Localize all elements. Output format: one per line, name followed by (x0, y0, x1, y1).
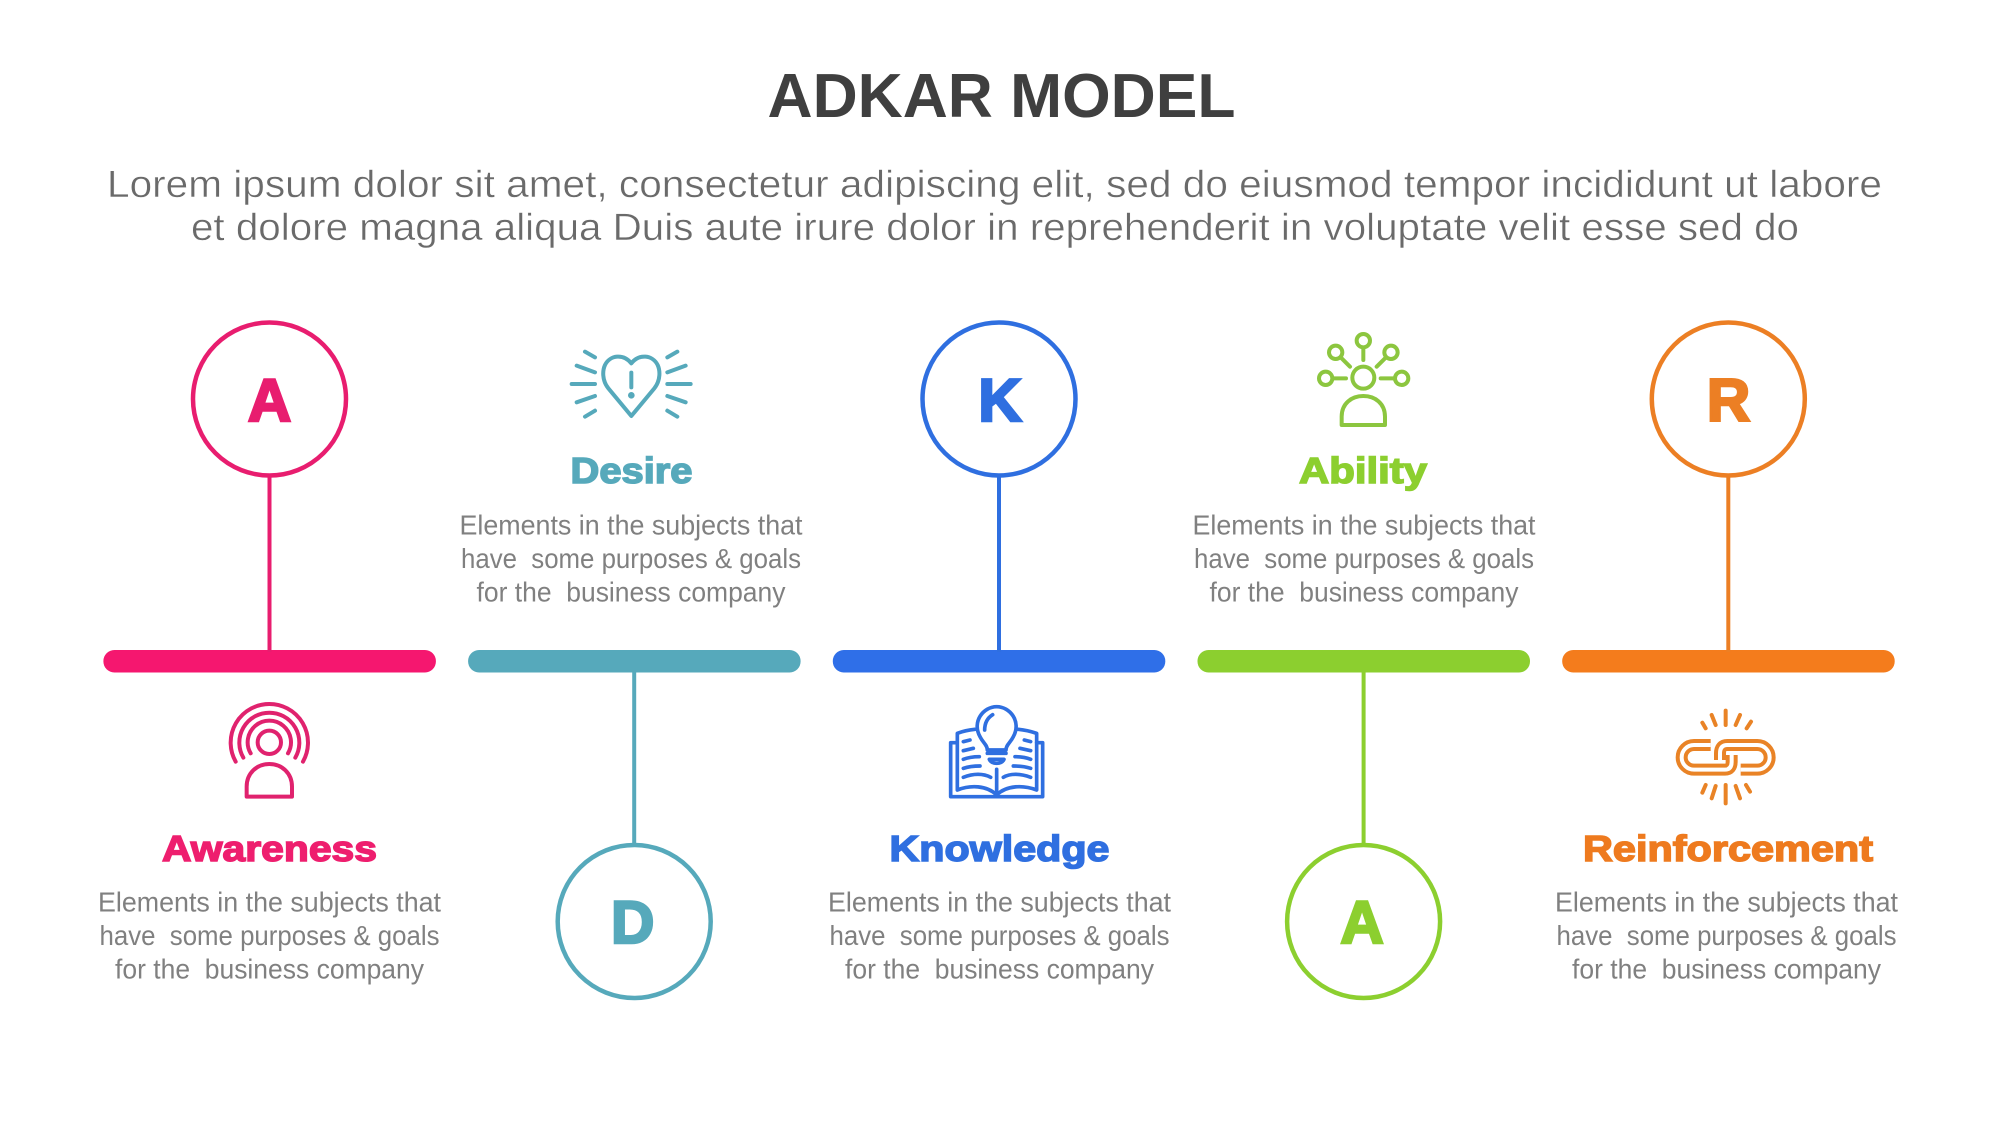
description: knowledge (828, 886, 1171, 984)
badge: letter R: R (1707, 367, 1750, 434)
subtitle: Lorem ipsum dolor sit amet, consectetur adipiscing elit, sed do eiusmod tempor incididunt ut labore (107, 164, 1882, 206)
heading: knowledge: Knowledge (890, 828, 1110, 869)
description: ability (1192, 510, 1536, 608)
timeline bar: knowledge (833, 650, 1165, 672)
stem: reinforcement (1726, 476, 1730, 652)
description: desire (460, 510, 803, 608)
badge: letter A (193, 322, 346, 476)
panel: desire (460, 352, 803, 998)
timeline bar: desire (468, 650, 801, 672)
description: ability: for the business company (1210, 576, 1519, 608)
panel: reinforcement (1555, 322, 1898, 984)
icon: heart with exclamation (572, 352, 691, 417)
heading: ability: Ability (1299, 450, 1427, 491)
panel: awareness (98, 322, 441, 984)
badge: letter K: K (978, 367, 1022, 434)
heading: desire: Desire (570, 450, 692, 491)
description: knowledge: have some purposes & goals (830, 920, 1170, 951)
description: ability: Elements in the subjects that (1192, 510, 1536, 540)
description: awareness: have some purposes & goals (100, 920, 440, 951)
description: reinforcement: Elements in the subjects that (1555, 886, 1898, 918)
badge: letter A (1287, 845, 1440, 998)
icon: person with connected nodes (1319, 334, 1408, 425)
icon: person broadcasting signal (231, 704, 308, 797)
badge: letter A: A (248, 367, 291, 434)
panel: ability (1192, 334, 1536, 998)
heading: awareness: Awareness (162, 828, 377, 869)
stem: knowledge (997, 476, 1001, 652)
subtitle: et dolore magna aliqua Duis aute irure dolor in reprehenderit in voluptate velit esse sed do (191, 207, 1799, 249)
panel: knowledge (828, 322, 1171, 984)
description: ability: have some purposes & goals (1194, 543, 1534, 574)
description: awareness (98, 886, 441, 984)
description: desire: for the business company (476, 576, 786, 608)
description: awareness: for the business company (115, 954, 424, 984)
description: desire: Elements in the subjects that (460, 510, 803, 540)
description: knowledge: Elements in the subjects that (828, 886, 1171, 918)
description: desire: have some purposes & goals (461, 543, 801, 574)
subtitle (107, 164, 1882, 249)
description: reinforcement (1555, 886, 1898, 984)
badge: letter K (922, 322, 1076, 476)
badge: letter R (1652, 322, 1805, 476)
stem: desire (632, 671, 636, 846)
badge: letter D: D (611, 889, 654, 956)
timeline bar: ability (1198, 650, 1530, 672)
heading: reinforcement: Reinforcement (1583, 828, 1873, 869)
timeline bar: awareness (103, 650, 436, 672)
description: reinforcement: for the business company (1572, 954, 1881, 984)
description: awareness: Elements in the subjects that (98, 886, 441, 918)
description: reinforcement: have some purposes & goals (1556, 920, 1896, 951)
title: ADKAR MODEL (768, 62, 1236, 131)
description: knowledge: for the business company (845, 954, 1154, 984)
icon: open book with light bulb (951, 707, 1043, 797)
timeline bar: reinforcement (1562, 650, 1895, 672)
icon: chain link with rays (1682, 711, 1770, 803)
badge: letter A: A (1340, 889, 1384, 956)
badge: letter D (558, 845, 711, 998)
stem: awareness (268, 476, 272, 652)
stem: ability (1362, 671, 1366, 846)
